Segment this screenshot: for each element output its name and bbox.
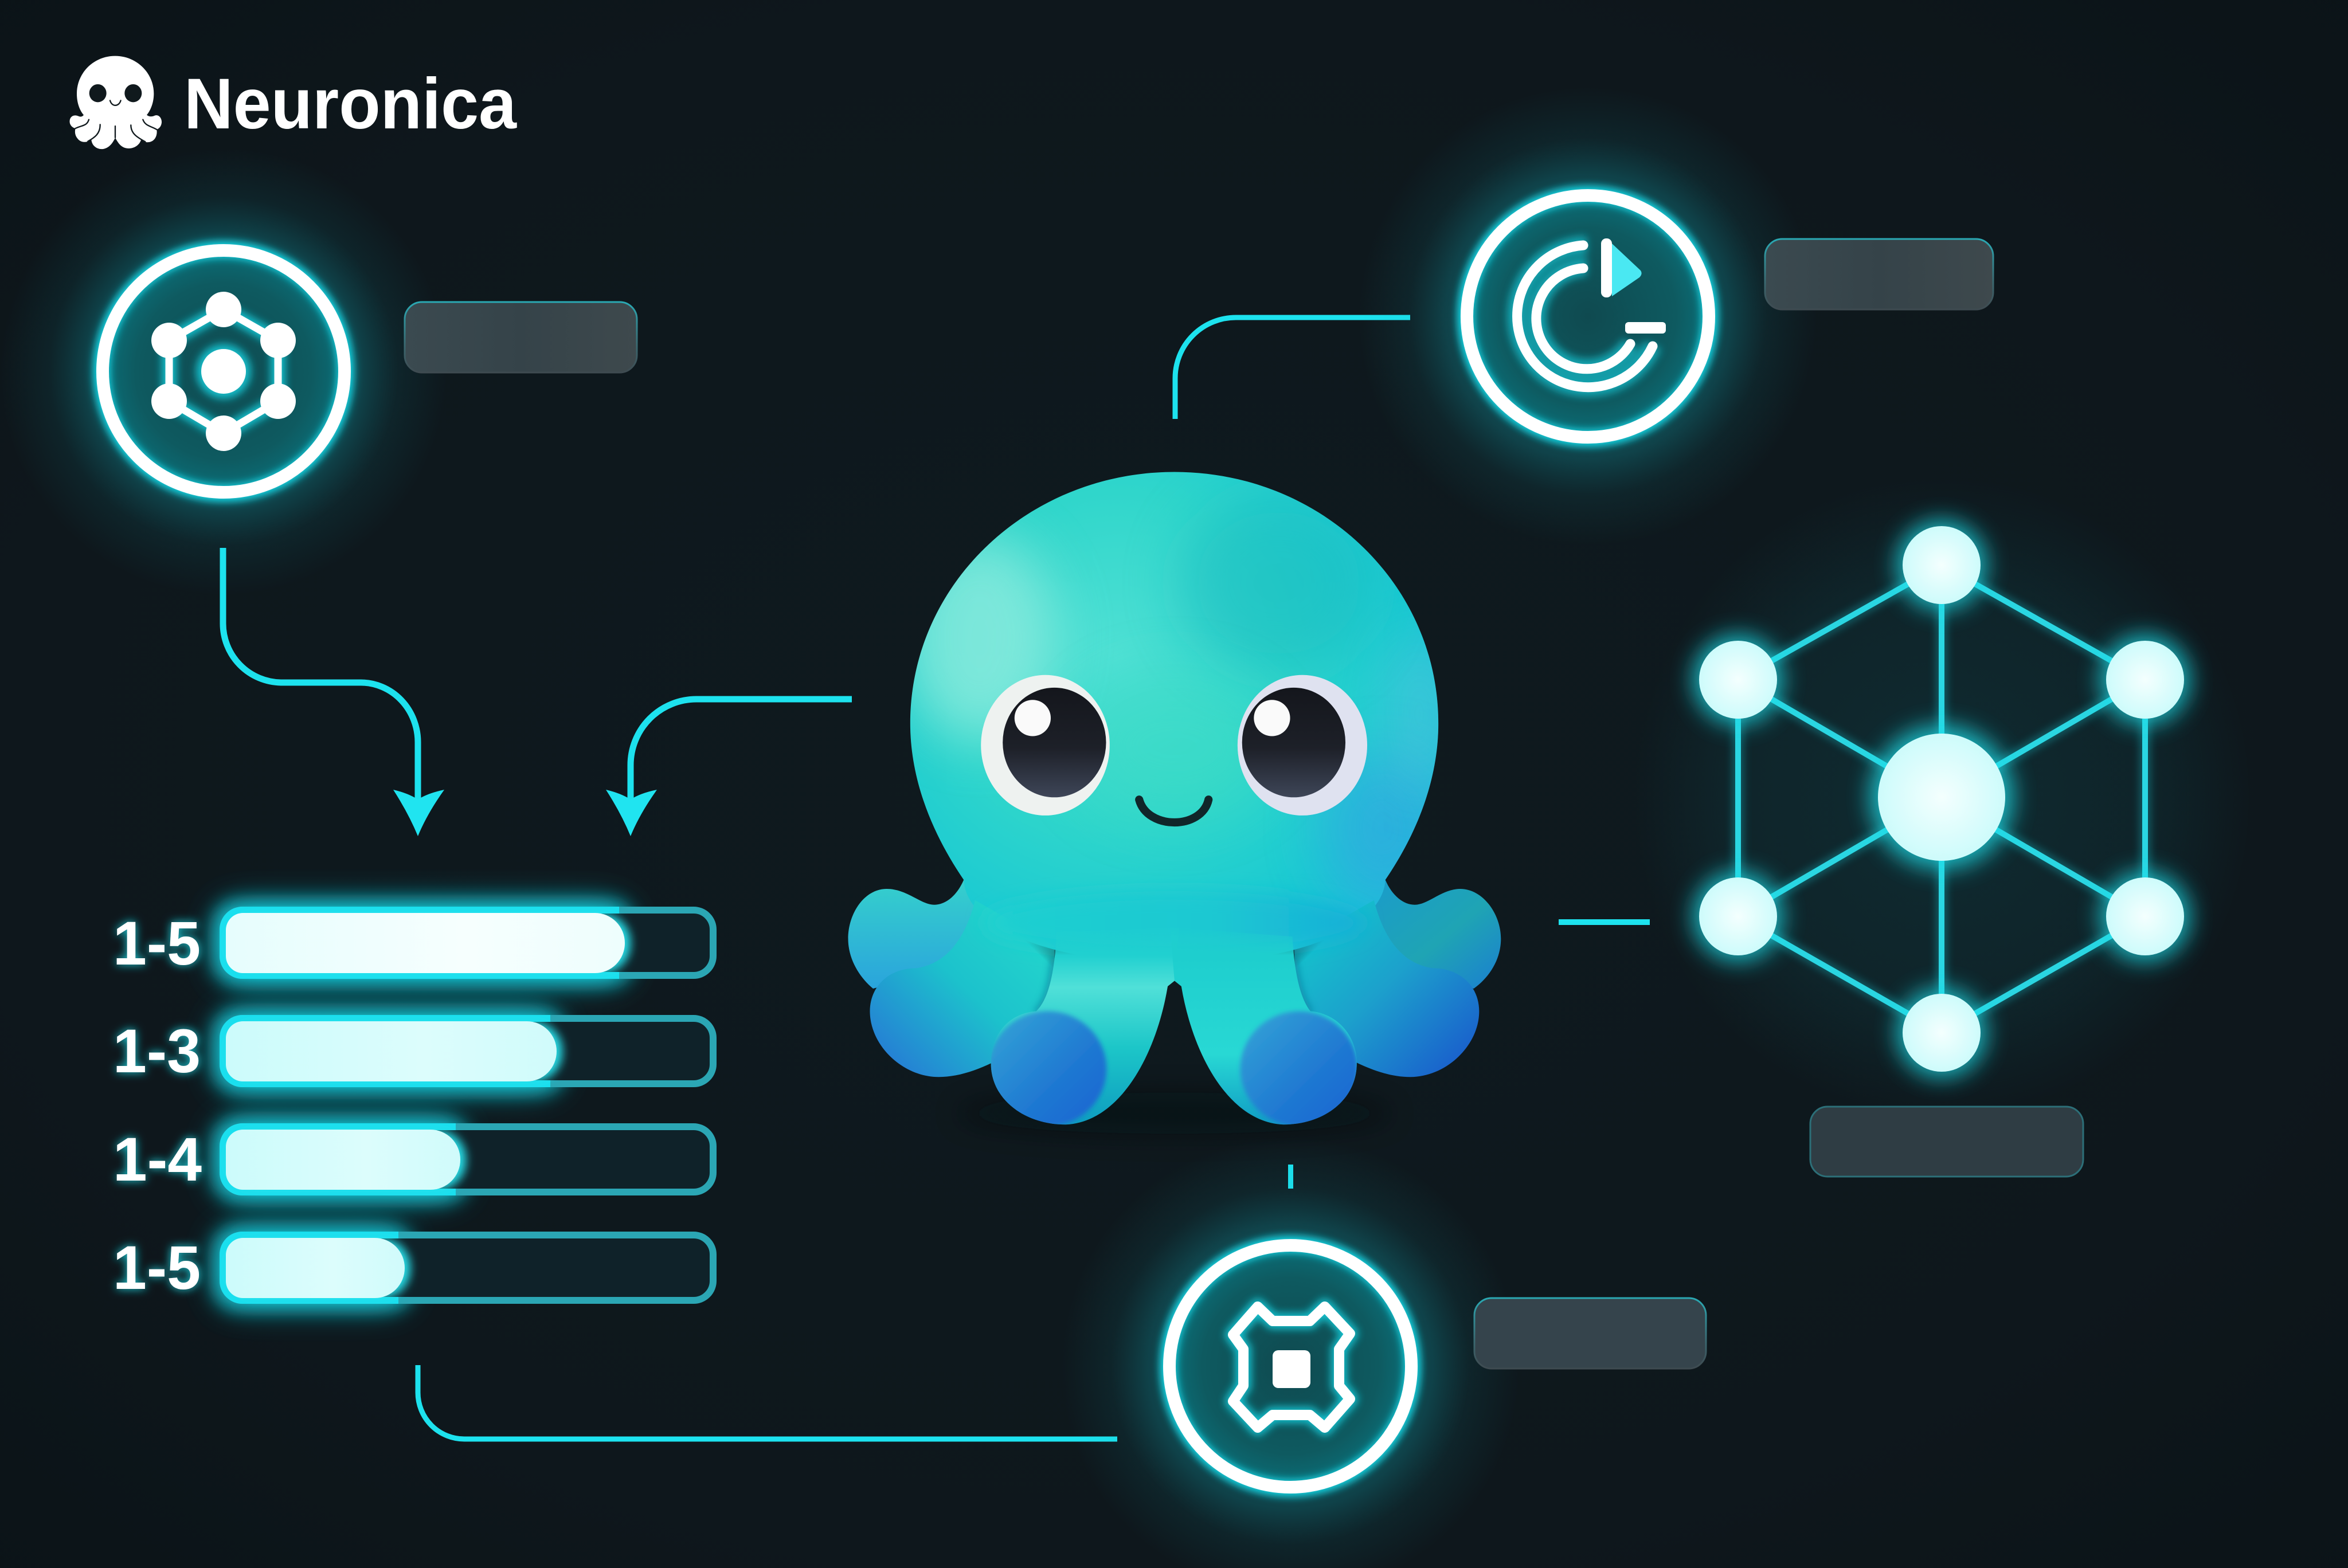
bar row 4: 1-5 [113, 1233, 201, 1302]
icon: octopus logo mark [70, 56, 162, 149]
bar row 2 [113, 1008, 713, 1094]
bar row 3 [113, 1116, 713, 1202]
connector: octopus to timer badge [1175, 317, 1410, 419]
bar row 4 [113, 1225, 713, 1311]
arrow: network badge to progress bars [223, 548, 444, 836]
connector: octopus to network [1559, 919, 1650, 925]
arrow: octopus to progress bars [606, 699, 852, 836]
octopus mascot [848, 472, 1501, 1134]
bar row 1 [113, 900, 713, 986]
middle tentacles [870, 900, 1479, 1077]
chin blend [984, 891, 1365, 955]
icon: chip badge [1061, 1137, 1520, 1568]
front left tentacle [989, 927, 1179, 1126]
label placeholder: timer badge [1765, 239, 1993, 309]
bar row 1: 1-5 [113, 908, 201, 978]
back tentacles [848, 880, 1501, 989]
icon: network badge [0, 148, 447, 595]
network diagram [1632, 476, 2251, 1118]
icon: timer badge [1359, 87, 1817, 546]
brand name: Neuronica [184, 64, 517, 144]
bar chart: progress bars [113, 900, 713, 1311]
connector: octopus to chip badge [1288, 1165, 1293, 1189]
right eye [1238, 675, 1367, 816]
label placeholder: chip badge [1474, 1298, 1706, 1369]
label placeholder: network badge [405, 302, 637, 373]
tentacle creases [1036, 959, 1310, 1013]
bar row 2: 1-3 [113, 1016, 201, 1085]
connector: progress bars to chip badge [418, 1365, 1117, 1439]
logo: Neuronica [70, 56, 517, 149]
label placeholder: network diagram [1810, 1107, 2083, 1177]
front right tentacle [1170, 927, 1358, 1126]
left eye [981, 675, 1110, 816]
mouth [1139, 799, 1208, 822]
bar row 3: 1-4 [113, 1124, 202, 1194]
head [902, 472, 1451, 964]
